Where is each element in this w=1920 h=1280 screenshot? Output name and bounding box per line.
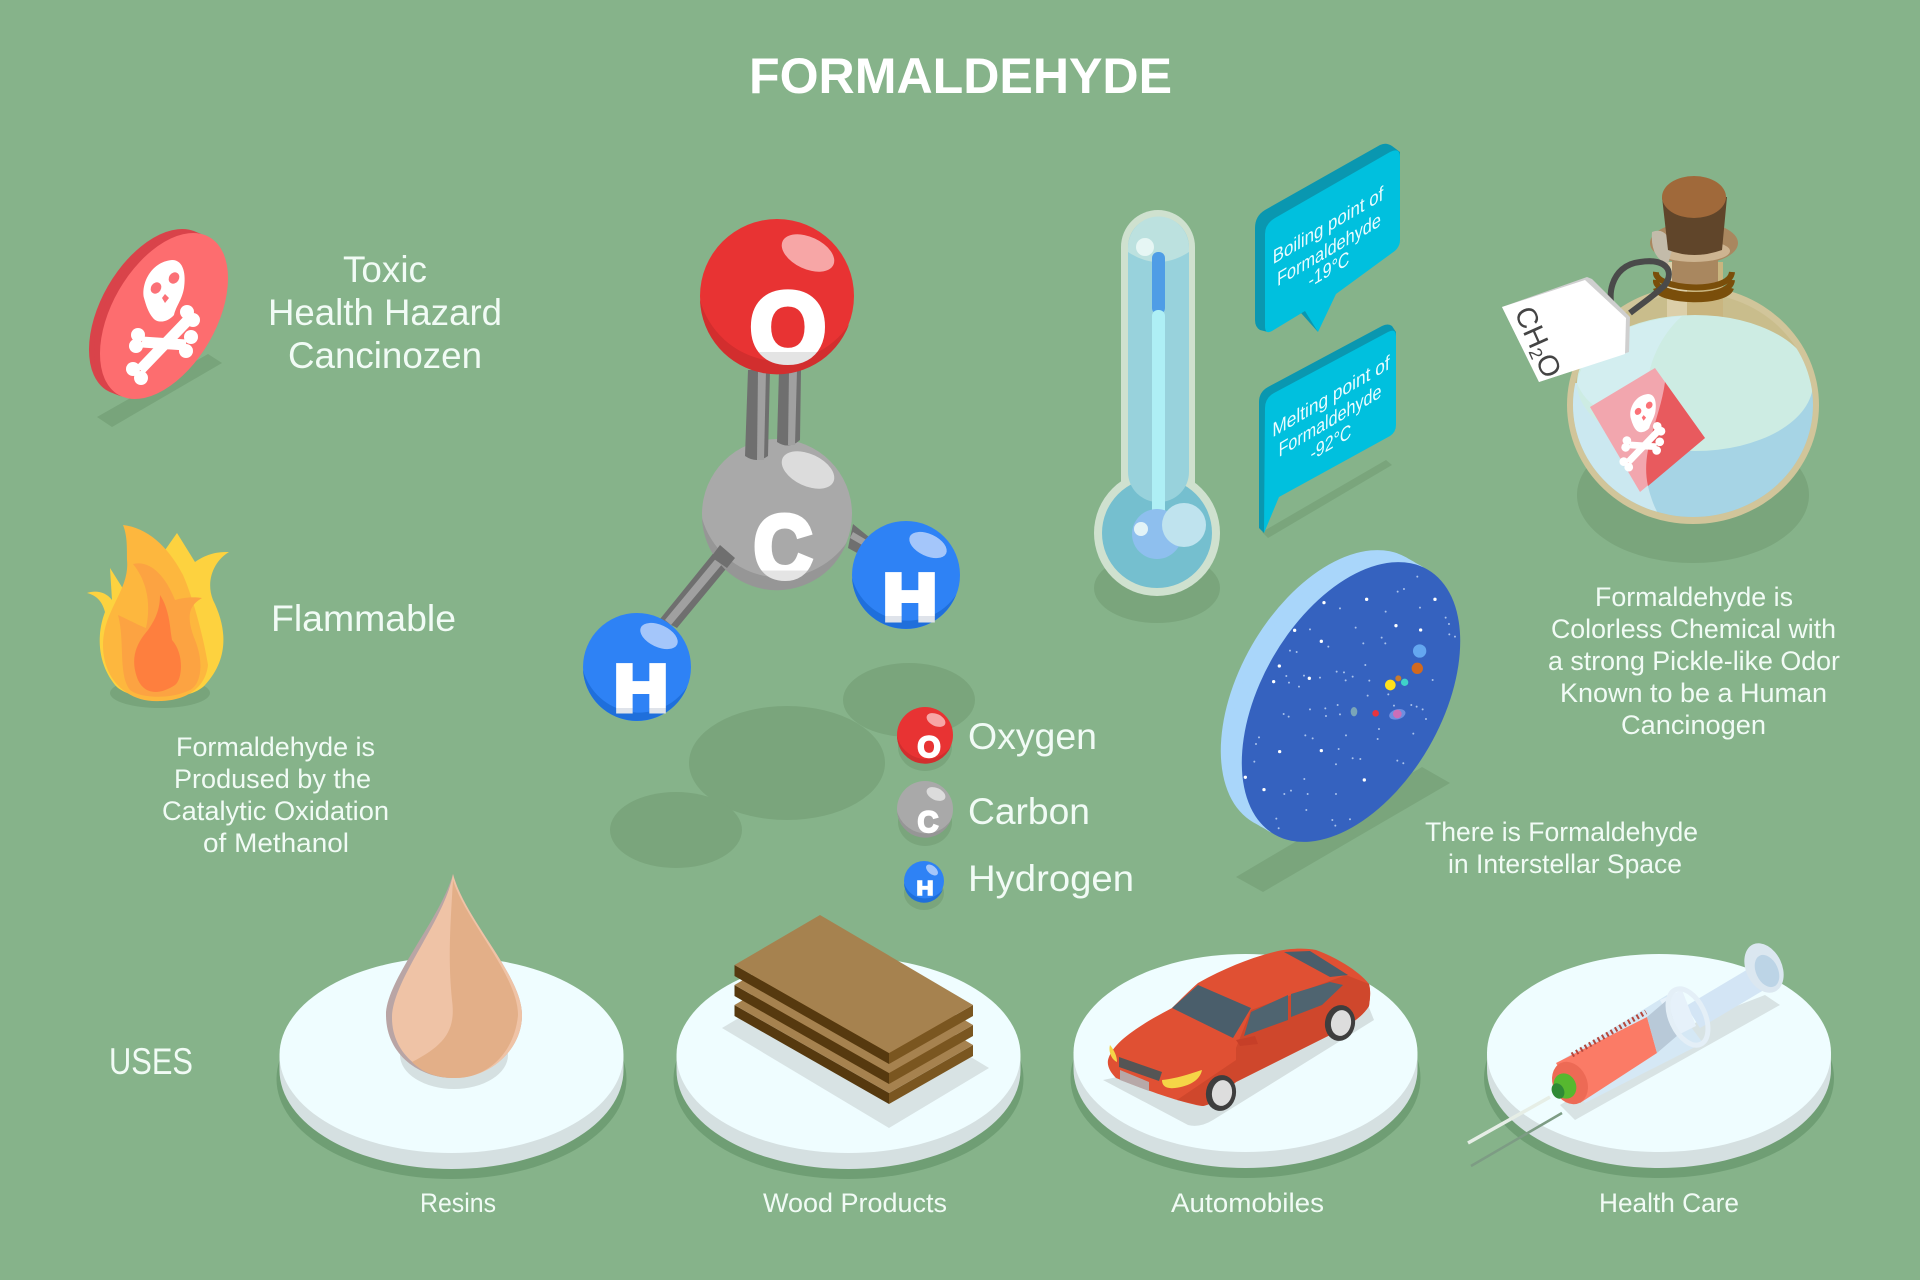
bottle shadow — [1577, 427, 1809, 563]
bottle label — [1590, 368, 1705, 492]
title: FORMALDEHYDE — [749, 48, 1172, 104]
callout: melting point — [1259, 324, 1396, 538]
atom: hydrogen left: H — [614, 651, 668, 725]
legend item: oxygen: O — [917, 731, 941, 764]
atom: hydrogen right — [852, 521, 960, 634]
panel: toxic hazard — [62, 207, 502, 427]
platform — [276, 957, 626, 1179]
tag with formula: O — [1529, 349, 1567, 383]
resins label: Resins — [420, 1188, 496, 1218]
thermometer shadow — [1094, 553, 1220, 623]
cork — [1662, 197, 1727, 255]
callout: melting point: Formaldehyde — [1279, 380, 1381, 462]
callout: boiling point: -19°C — [1309, 247, 1349, 293]
icon: thermometer — [1094, 210, 1220, 596]
legend item: oxygen: Oxygen — [968, 716, 1097, 757]
tag with formula — [1502, 261, 1669, 383]
tag with formula: CH — [1508, 302, 1554, 353]
colorless chemical text block: Known to be a Human — [1560, 678, 1827, 708]
legend item: carbon: Carbon — [968, 791, 1090, 832]
colorless chemical text block: Colorless Chemical with — [1551, 614, 1836, 644]
interstellar text — [1425, 817, 1698, 879]
legend item: oxygen — [897, 707, 1097, 771]
methanol text block: of Methanol — [203, 828, 349, 858]
callout: melting point: Melting point of — [1272, 351, 1390, 443]
colorless chemical text block: Cancinogen — [1621, 710, 1766, 740]
methanol text block: Catalytic Oxidation — [162, 796, 389, 826]
icon: flame — [87, 525, 229, 708]
icon: resin drop — [386, 874, 522, 1089]
legend item: carbon — [897, 781, 1090, 846]
panel: thermometer — [1094, 144, 1400, 623]
panel: bottle — [1502, 176, 1840, 740]
uses heading: USES — [109, 1041, 193, 1082]
callout: boiling point: Formaldehyde — [1277, 208, 1381, 292]
use card: automobiles — [1070, 949, 1420, 1218]
platform — [1070, 954, 1420, 1178]
icon: skull badge — [62, 207, 255, 427]
icon: syringe — [1468, 937, 1791, 1166]
legend item: hydrogen: Hydrogen — [968, 858, 1134, 899]
flammable label: Flammable — [271, 598, 456, 639]
toxic label: Cancinozen — [288, 335, 482, 376]
icon: space disc — [1176, 512, 1505, 880]
panel: molecule — [583, 219, 975, 868]
wood products label: Wood Products — [763, 1188, 947, 1218]
disc shadow — [1236, 767, 1450, 892]
toxic label: Toxic — [343, 249, 427, 290]
atom: oxygen — [700, 219, 854, 382]
colorless chemical text block — [1548, 582, 1840, 740]
methanol text block — [162, 732, 389, 858]
atom: oxygen: O — [750, 272, 826, 382]
automobiles label: Automobiles — [1171, 1188, 1324, 1218]
icon: wood boards — [722, 915, 989, 1128]
callout: boiling point: Boiling point of — [1273, 182, 1384, 270]
tag with formula: 2 — [1525, 345, 1547, 362]
panel: interstellar space — [1176, 512, 1698, 892]
atom: carbon — [702, 370, 852, 596]
legend item: hydrogen — [904, 858, 1134, 910]
platform — [1484, 954, 1834, 1178]
legend item: hydrogen: H — [916, 878, 934, 900]
health care label: Health Care — [1599, 1188, 1739, 1218]
methanol text block: Prodused by the — [174, 764, 371, 794]
rope — [1656, 272, 1732, 299]
toxic label — [268, 249, 502, 376]
interstellar text: There is Formaldehyde — [1425, 817, 1698, 847]
bonds — [660, 524, 880, 628]
interstellar text: in Interstellar Space — [1448, 849, 1682, 879]
use card: resins — [276, 874, 626, 1218]
colorless chemical text block: Formaldehyde is — [1595, 582, 1793, 612]
atom: carbon: C — [754, 497, 812, 596]
atom: hydrogen right: H — [883, 560, 937, 634]
molecule shadows — [610, 663, 975, 868]
legend: atoms — [897, 707, 1134, 910]
toxic label: Health Hazard — [268, 292, 502, 333]
icon: poison bottle — [1560, 176, 1830, 533]
callout: boiling point — [1255, 144, 1400, 332]
callout: melting point: -92°C — [1311, 420, 1351, 466]
colorless chemical text block: a strong Pickle-like Odor — [1548, 646, 1840, 676]
icon: red car — [1103, 949, 1374, 1126]
panel: flammable — [87, 525, 456, 858]
legend item: carbon: C — [918, 806, 938, 839]
atom: hydrogen left — [583, 613, 691, 725]
platform — [674, 957, 1024, 1179]
use card: wood products — [674, 915, 1024, 1218]
use card: health care — [1468, 937, 1834, 1218]
methanol text block: Formaldehyde is — [176, 732, 375, 762]
